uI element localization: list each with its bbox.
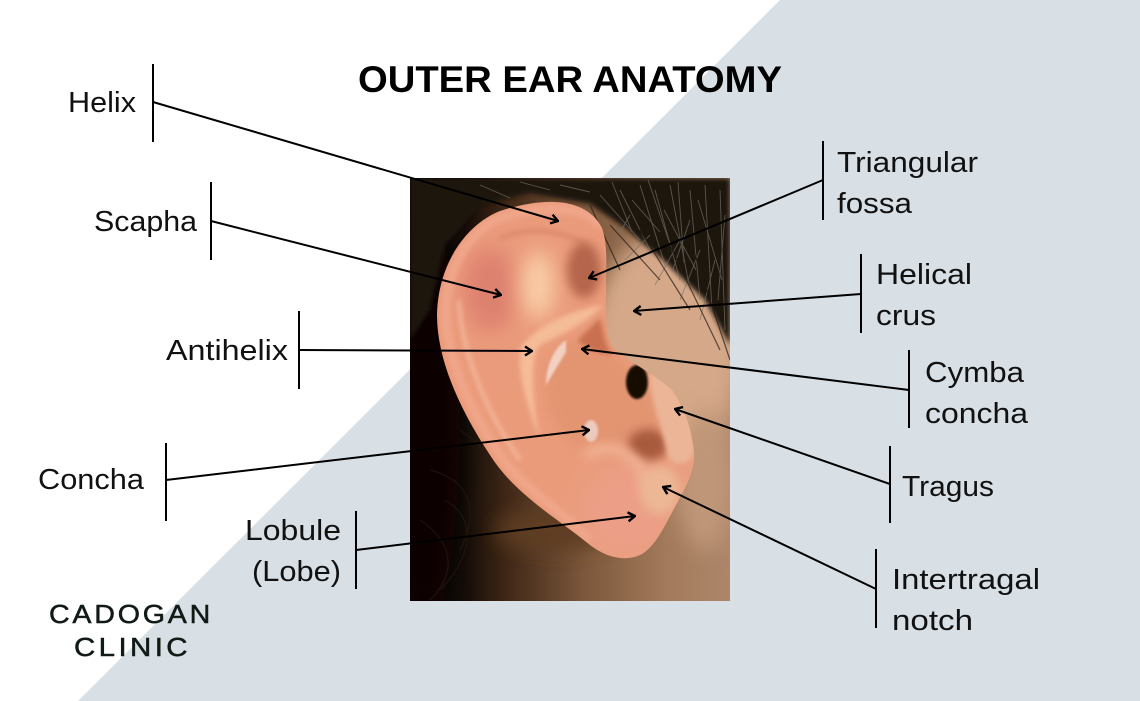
tragus label and pointer <box>675 409 994 523</box>
scapha label and pointer <box>94 182 501 295</box>
scapha label and pointer: Scapha <box>94 206 198 238</box>
cymba concha label and pointer: concha <box>925 398 1029 430</box>
lobule label and pointer <box>245 511 635 589</box>
cymba / concha <box>551 344 657 442</box>
logo: CADOGAN <box>49 599 213 629</box>
antihelix label and pointer: Antihelix <box>166 335 289 367</box>
antihelix fold <box>520 305 603 440</box>
helix label and pointer: Helix <box>68 87 137 119</box>
triangular fossa shadow <box>567 242 601 298</box>
lobe <box>594 480 662 537</box>
helical crus label and pointer: crus <box>876 300 936 332</box>
tragus label and pointer: Tragus <box>902 471 994 503</box>
helix rim <box>446 209 602 540</box>
ear shape <box>437 202 694 558</box>
lobule label and pointer: (Lobe) <box>252 556 341 588</box>
concha label and pointer <box>38 430 589 521</box>
intertragal notch label and pointer: Intertragal <box>892 564 1040 596</box>
hair <box>410 178 730 345</box>
logo: CLINIC <box>74 632 191 662</box>
ear canal <box>626 365 648 399</box>
face skin <box>606 236 730 437</box>
helical crus label and pointer: Helical <box>876 259 972 291</box>
photo: ear <box>410 178 730 601</box>
title: OUTER EAR ANATOMY <box>358 59 782 100</box>
scapha <box>464 248 516 332</box>
triangular fossa label and pointer <box>589 141 978 278</box>
triangular fossa label and pointer: Triangular <box>837 147 978 179</box>
helix label and pointer <box>68 64 558 221</box>
logo <box>49 599 213 662</box>
intertragal notch label and pointer <box>663 487 1040 637</box>
helical crus label and pointer <box>634 254 972 333</box>
intertragal notch label and pointer: notch <box>892 605 973 637</box>
cymba concha label and pointer: Cymba <box>925 357 1025 389</box>
lobule label and pointer: Lobule <box>245 515 341 547</box>
tragus <box>650 372 695 464</box>
triangular fossa label and pointer: fossa <box>837 188 913 220</box>
concha label and pointer: Concha <box>38 464 145 496</box>
cymba concha label and pointer <box>582 349 1029 430</box>
